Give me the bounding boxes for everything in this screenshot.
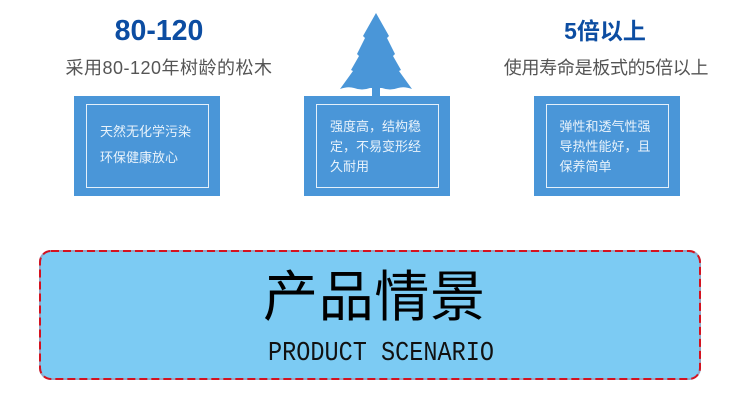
icon: pine tree: [340, 13, 412, 96]
subheading: service life: 使用寿命是板式的5倍以上: [504, 58, 708, 78]
panel text: 天然无化学污染: [100, 124, 191, 139]
panel: strength: [304, 96, 450, 196]
heading: 5x: 5倍以上: [564, 18, 646, 44]
panel text: 弹性和透气性强: [560, 119, 651, 134]
panel text: 久耐用: [330, 159, 369, 174]
panel: elasticity: [534, 96, 680, 196]
banner subtitle: PRODUCT SCENARIO: [268, 339, 494, 369]
banner title: 产品情景: [263, 252, 485, 332]
panel inner frame: [316, 104, 439, 188]
panel: no chemical pollution: [74, 96, 220, 196]
panel text: [560, 119, 651, 174]
panel text: 定，不易变形经: [330, 139, 421, 154]
panel text: [100, 124, 191, 165]
panel text: 导热性能好，且: [560, 139, 651, 154]
panel inner frame: [546, 104, 668, 188]
panel inner frame: [86, 104, 209, 188]
panel text: 保养简单: [560, 159, 612, 174]
panel text: 环保健康放心: [100, 150, 178, 165]
panel text: [330, 119, 421, 174]
heading: 80-120: 80-120: [115, 15, 203, 47]
subheading: pine age: 采用80-120年树龄的松木: [65, 58, 273, 78]
panel text: 强度高，结构稳: [330, 119, 421, 134]
